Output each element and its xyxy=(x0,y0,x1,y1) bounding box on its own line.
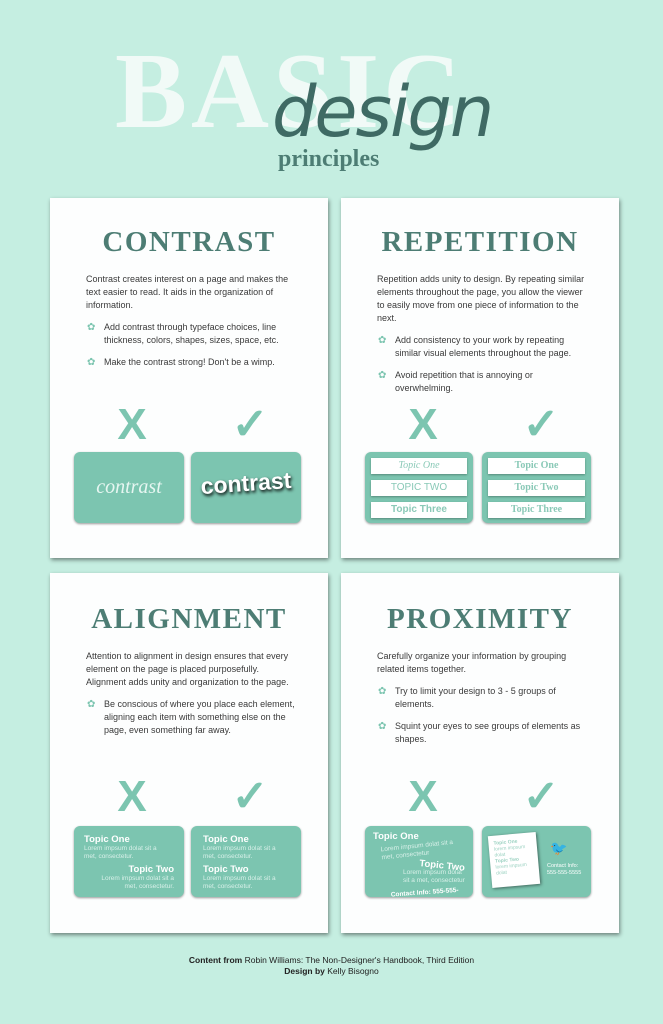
bad example: Lorem impsum dolat sit a xyxy=(84,845,157,852)
text: contrast: Add contrast through typeface choices, line thickness, colors, shapes, sizes, space, etc. xyxy=(104,322,279,345)
good example: contrast xyxy=(200,467,292,499)
good example xyxy=(191,826,301,897)
text: repetition xyxy=(377,274,584,393)
heading: contrast: CONTRAST xyxy=(102,226,276,258)
bad example: Lorem impsum dolat sit a xyxy=(101,875,174,882)
good example: Topic Two xyxy=(203,864,249,875)
good example: Topic Three xyxy=(511,504,562,515)
good example xyxy=(482,452,591,523)
icon: check: ✓ xyxy=(232,400,268,449)
heading: proximity: PROXIMITY xyxy=(387,603,573,635)
text: proximity: Carefully organize your information by grouping related items together. xyxy=(377,651,566,674)
good example: 🐦 xyxy=(550,840,567,856)
icon: check: ✓ xyxy=(523,400,559,449)
bad example: Topic One xyxy=(373,831,419,842)
icon: X: X xyxy=(117,400,147,449)
heading: repetition: REPETITION xyxy=(381,226,579,258)
text: alignment: Attention to alignment in design ensures that every element on the page is placed purposefully. Alignment adds unity and organization to the page. xyxy=(86,651,289,687)
heading: alignment: ALIGNMENT xyxy=(91,603,287,635)
text: repetition: Avoid repetition that is annoying or overwhelming. xyxy=(395,370,533,393)
bad example: met, consectetur. xyxy=(124,883,174,890)
good example: 555-555-5555 xyxy=(547,870,581,876)
bad example: Topic Two xyxy=(419,858,465,874)
text: contrast: Contrast creates interest on a page and makes the text easier to read. It aids in the organization of information. xyxy=(86,274,288,310)
bad example: Lorem impsum dolat sit a met, consectetur xyxy=(403,869,465,884)
panel: contrast xyxy=(50,198,328,558)
footer credits: Design by Kelly Bisogno xyxy=(284,966,379,976)
text: alignment: Be conscious of where you place each element, aligning each item with something else on the page, even something far away. xyxy=(104,699,295,735)
bad example: Topic One xyxy=(84,834,130,845)
bad example xyxy=(74,826,184,897)
bad example xyxy=(365,452,473,523)
good example: Topic One xyxy=(493,839,518,847)
bad example: contrast xyxy=(96,476,162,498)
icon: X: X xyxy=(408,400,438,449)
bad example xyxy=(74,452,184,523)
panel: repetition xyxy=(341,198,619,558)
good example xyxy=(482,826,591,897)
good example xyxy=(191,452,301,523)
good example: Lorem impsum dolat sit a xyxy=(203,875,276,882)
bad example: Lorem impsum dolat sit a met, consectetur xyxy=(380,839,453,861)
icon: check: ✓ xyxy=(523,772,559,821)
text: alignment xyxy=(86,651,295,735)
good example: met, consectetur. xyxy=(203,883,252,890)
footer credits xyxy=(189,955,474,976)
text: contrast: Make the contrast strong! Don't be a wimp. xyxy=(104,357,275,367)
icon: X: X xyxy=(117,772,147,821)
icon: X: X xyxy=(408,772,438,821)
text: repetition: Add consistency to your work by repeating similar visual elements throughout the page. xyxy=(395,335,571,358)
bad example: TOPIC TWO xyxy=(391,482,447,493)
footer credits: Content from Robin Williams: The Non-Designer's Handbook, Third Edition xyxy=(189,955,474,965)
icon: check: ✓ xyxy=(232,772,268,821)
title: principles: principles xyxy=(278,146,379,172)
good example: Topic One xyxy=(203,834,249,845)
good example: lorem impsum dolat xyxy=(494,844,526,859)
text: contrast xyxy=(86,274,288,367)
panel: proximity xyxy=(341,573,619,933)
bad example: Topic One xyxy=(398,460,440,471)
good example: Contact Info: xyxy=(547,863,578,869)
good example: Topic Two xyxy=(514,482,558,493)
text: proximity xyxy=(377,651,580,744)
bad example: Topic Two xyxy=(128,864,174,875)
text: repetition: Repetition adds unity to design. By repeating similar elements throughout the page, you allow the viewer to easily move from one piece of information to the next. xyxy=(377,274,584,323)
good example: Topic Two xyxy=(495,857,519,865)
panel: alignment xyxy=(50,573,328,933)
bad example: met, consectetur. xyxy=(84,853,134,860)
title: BASIC: BASIC xyxy=(115,32,465,151)
good example: met, consectetur. xyxy=(203,853,252,860)
text: proximity: Try to limit your design to 3 - 5 groups of elements. xyxy=(395,686,556,709)
title: design: design xyxy=(272,71,492,153)
title xyxy=(115,32,492,172)
text: proximity: Squint your eyes to see groups of elements as shapes. xyxy=(395,721,580,744)
good example: Topic One xyxy=(515,460,558,471)
good example: Lorem impsum dolat sit a xyxy=(203,845,276,852)
bad example: Topic Three xyxy=(391,504,447,515)
good example: lorem impsum dolat xyxy=(495,862,527,877)
bad example xyxy=(365,826,473,897)
